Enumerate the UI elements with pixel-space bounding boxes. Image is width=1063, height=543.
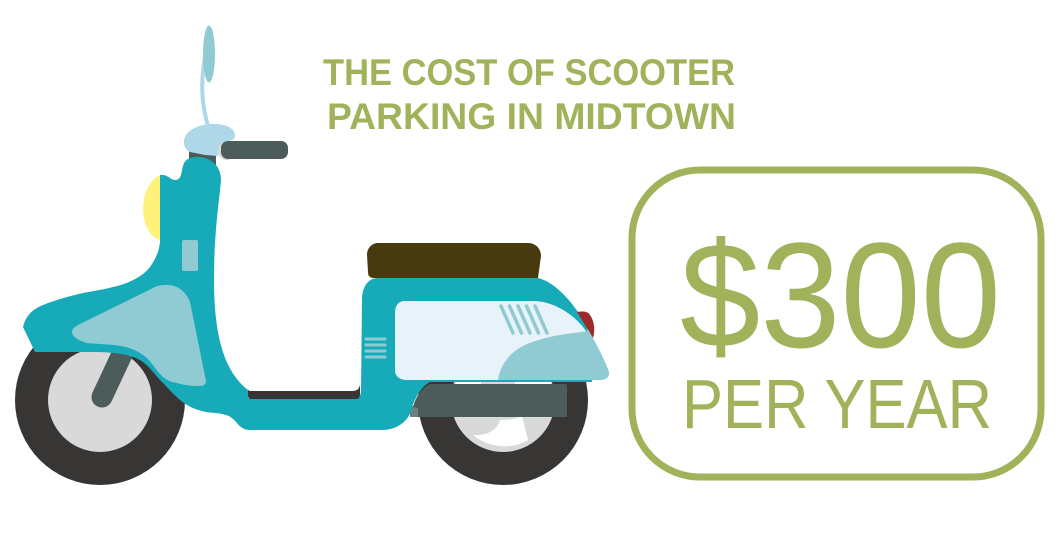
icon: exhaust xyxy=(413,384,567,417)
icon: tail light xyxy=(577,311,594,338)
icon: front wheel xyxy=(15,315,185,485)
icon: floorboard gap xyxy=(248,383,360,399)
icon: seat xyxy=(367,243,541,278)
price period: PER YEAR xyxy=(682,365,992,443)
title xyxy=(323,52,736,137)
icon: rear fender xyxy=(395,301,609,380)
icon: side vents xyxy=(366,339,385,357)
title: PARKING IN MIDTOWN xyxy=(327,96,736,137)
icon: fender accent xyxy=(498,331,609,380)
icon: steering neck xyxy=(189,148,216,175)
icon: mirror xyxy=(203,26,215,82)
icon: mirror stem xyxy=(202,57,208,126)
icon: fender vents xyxy=(501,306,547,333)
icon: handlebar cover xyxy=(184,124,235,156)
icon: headlight xyxy=(143,175,160,240)
title: THE COST OF SCOOTER xyxy=(323,52,735,93)
illustration: scooter xyxy=(15,26,609,485)
icon: scooter body xyxy=(23,157,592,430)
icon: handlebar collar xyxy=(217,140,237,160)
badge outline xyxy=(632,170,1041,477)
icon: front badge xyxy=(182,240,198,271)
icon: rear wheel xyxy=(418,315,588,485)
callout: price badge xyxy=(632,170,1041,477)
icon: front panel xyxy=(72,285,206,386)
price figure: $300 xyxy=(680,211,1001,379)
icon: handlebar grip xyxy=(221,141,288,159)
icon: exhaust bracket xyxy=(410,406,420,417)
